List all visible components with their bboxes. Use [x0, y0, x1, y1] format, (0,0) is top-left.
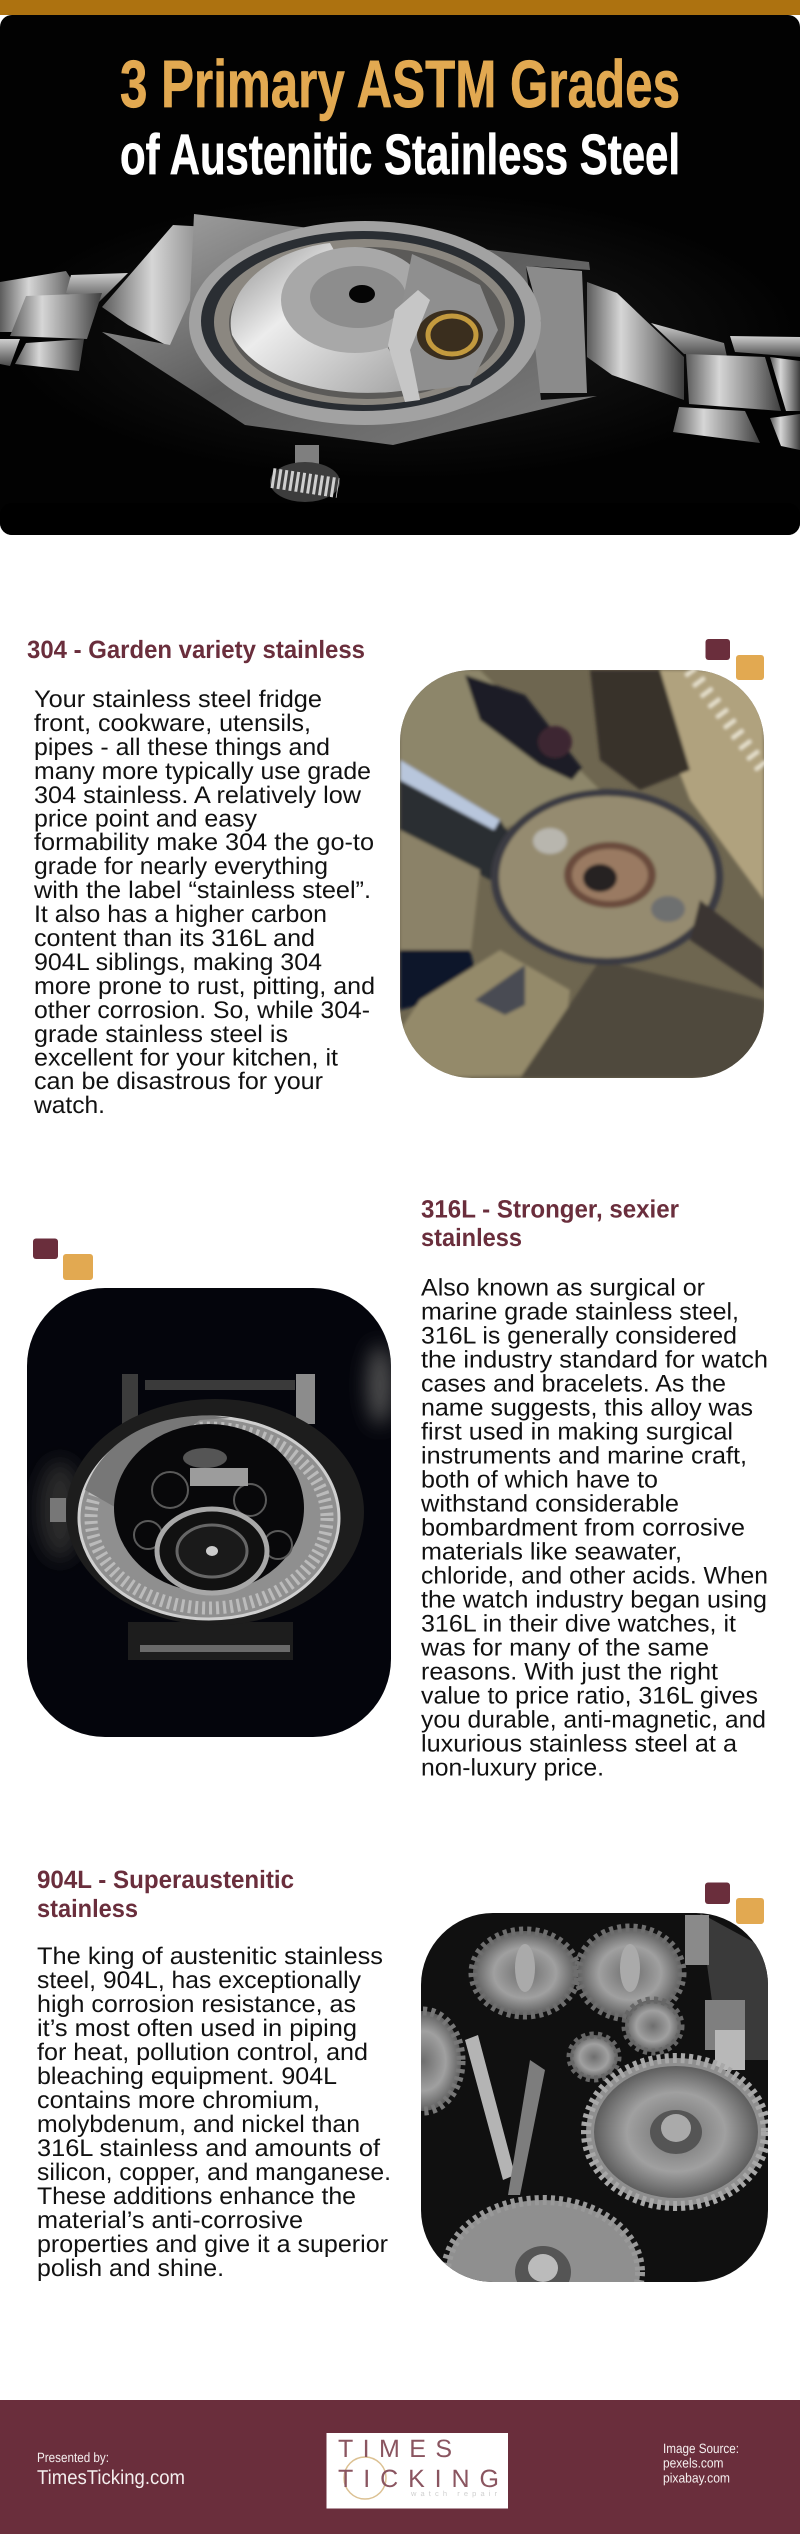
title — [120, 47, 680, 187]
text block: 304 description: price point and easy — [34, 806, 257, 832]
image source: pixabay.com — [663, 2470, 730, 2486]
text block: 304 description: pipes - all these things and — [34, 734, 330, 761]
text block: 304 description: grade stainless steel is — [34, 1021, 288, 1048]
image source: pexels.com — [663, 2456, 724, 2470]
text block: 304 description: more prone to rust, pitting, and — [34, 973, 375, 1000]
text block: 304 description: many more typically use grade — [34, 758, 371, 785]
text block: 316L description: name suggests, this alloy was — [421, 1394, 753, 1422]
text block: 304 description: Your stainless steel fridge — [34, 686, 322, 713]
text block: 904L description: 316L stainless and amounts of — [37, 2135, 380, 2162]
text block: 316L description: you durable, anti-magnetic, and — [421, 1706, 766, 1734]
text block: 316L description: luxurious stainless steel at a — [421, 1730, 738, 1758]
image source — [663, 2441, 739, 2486]
text block: 316L description: Also known as surgical or — [421, 1274, 705, 1302]
text block: 316L description: both of which have to — [421, 1466, 658, 1494]
text block: 316L description: the watch industry began using — [421, 1586, 767, 1614]
heading: 904L: 904L - Superaustenitic — [37, 1866, 294, 1894]
photo: skeleton watch — [27, 1288, 392, 1737]
header photo: stainless steel watch back — [0, 15, 800, 535]
text block: 904L description: it’s most often used in piping — [37, 2015, 357, 2042]
text block: 904L description: properties and give it a superior — [37, 2231, 388, 2258]
heading: 904L: stainless — [37, 1895, 138, 1923]
section: 904L — [37, 1870, 768, 2282]
text block: 304 description: other corrosion. So, while 304- — [34, 997, 370, 1024]
heading: 304: 304 - Garden variety stainless — [27, 636, 365, 664]
text block: 904L description: for heat, pollution control, and — [37, 2039, 368, 2066]
text block: 316L description: value to price ratio, 316L gives — [421, 1682, 758, 1710]
icon: squares accent — [33, 1238, 93, 1280]
text block: 316L description: first used in making surgical — [421, 1418, 733, 1446]
text block: 304 description: 904L siblings, making 304 — [34, 949, 322, 976]
text block: 904L description: These additions enhance the — [37, 2183, 356, 2210]
logo: Times Ticking watch repair: watch repair — [410, 2489, 498, 2498]
text block: 316L description: chloride, and other acids. When — [421, 1562, 768, 1590]
header bottom band — [0, 503, 800, 535]
text block: 904L description: The king of austenitic stainless — [37, 1943, 383, 1970]
text block: 904L description: high corrosion resistance, as — [37, 1991, 356, 2018]
text block: 316L description: the industry standard for watch — [421, 1346, 768, 1374]
logo: Times Ticking watch repair: TIMES — [338, 2435, 452, 2463]
text block: 304 description: front, cookware, utensils, — [34, 710, 311, 737]
presented by — [37, 2450, 185, 2489]
heading: 316L — [421, 1196, 679, 1252]
icon: squares accent — [706, 639, 764, 680]
text block: 316L description: 316L is generally considered — [421, 1322, 737, 1350]
logo: Times Ticking watch repair: TICKING — [338, 2465, 499, 2493]
text block: 904L description: steel, 904L, has exceptionally — [37, 1967, 361, 1994]
text block: 316L description: 316L in their dive watches, it — [421, 1610, 736, 1638]
heading: 316L: 316L - Stronger, sexier — [421, 1196, 679, 1224]
heading: 904L — [37, 1866, 294, 1923]
text block: 316L description: withstand considerable — [420, 1490, 679, 1518]
text block: 904L description: contains more chromium, — [37, 2087, 320, 2114]
text block: 904L description: molybdenum, and nickel than — [37, 2111, 360, 2138]
text block: 304 description: It also has a higher carbon — [34, 901, 327, 928]
text block: 304 description: excellent for your kitchen, it — [34, 1044, 338, 1072]
text block: 316L description: instruments and marine craft, — [421, 1442, 747, 1470]
text block: 304 description: formability make 304 the go-to — [34, 829, 374, 856]
logo: Times Ticking watch repair — [326, 2433, 508, 2508]
section: 304 — [27, 636, 764, 1119]
text block: 316L description: bombardment from corrosive — [421, 1514, 745, 1542]
top gold bar — [0, 0, 800, 15]
text block: 904L description — [37, 1943, 391, 2282]
photo: machine gears — [421, 1913, 768, 2282]
text block: 316L description: non-luxury price. — [421, 1754, 604, 1782]
footer — [0, 2400, 800, 2534]
text block: 304 description — [33, 686, 375, 1119]
text block: 904L description: silicon, copper, and manganese. — [37, 2159, 391, 2186]
photo: watch movement close-up — [400, 670, 764, 1078]
text block: 904L description: material’s anti-corrosive — [37, 2207, 303, 2234]
section: 316L — [27, 1196, 768, 1782]
icon: squares accent — [705, 1882, 764, 1924]
text block: 304 description: watch. — [33, 1092, 105, 1119]
text block: 904L description: bleaching equipment. 904L — [37, 2063, 337, 2090]
image source: Image Source: — [663, 2441, 739, 2456]
text block: 316L description: reasons. With just the right — [421, 1658, 718, 1686]
text block: 304 description: with the label “stainless steel”. — [33, 877, 371, 904]
presented by: TimesTicking.com — [37, 2467, 185, 2489]
text block: 316L description: marine grade stainless steel, — [421, 1298, 739, 1326]
text block: 316L description: materials like seawater, — [421, 1538, 682, 1566]
text block: 316L description: was for many of the same — [420, 1634, 709, 1662]
text block: 904L description: polish and shine. — [37, 2255, 224, 2282]
text block: 304 description: grade for nearly everything — [34, 853, 328, 880]
text block: 304 description: 304 stainless. A relatively low — [34, 782, 362, 809]
text block: 316L description — [420, 1274, 768, 1782]
text block: 304 description: content than its 316L and — [34, 925, 315, 952]
heading: 316L: stainless — [421, 1224, 522, 1252]
presented by: Presented by: — [37, 2450, 109, 2465]
text block: 316L description: cases and bracelets. As the — [421, 1370, 726, 1398]
text block: 304 description: can be disastrous for your — [34, 1068, 323, 1095]
